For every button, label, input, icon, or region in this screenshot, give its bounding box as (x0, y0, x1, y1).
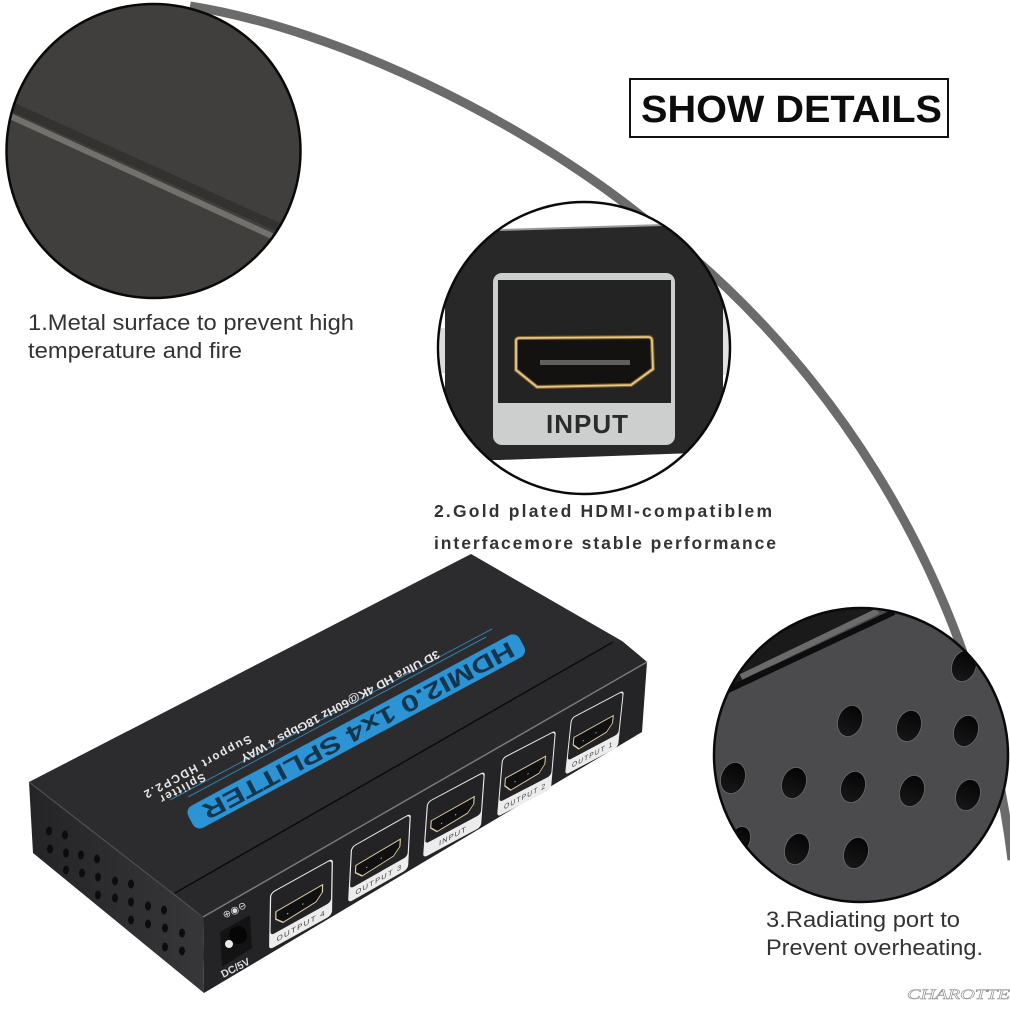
caption 2: 2.Gold plated HDMI-compatiblem (434, 501, 772, 521)
connecting arc (190, 6, 1010, 860)
blue product label (185, 632, 528, 831)
left vented face (29, 782, 204, 993)
input port frame (493, 273, 675, 445)
port: output 4: OUTPUT 4 (277, 909, 325, 944)
caption 2 (434, 501, 776, 553)
dark device body (445, 225, 723, 460)
port: output 2: OUTPUT 2 (504, 781, 545, 811)
HDMI splitter product (29, 554, 647, 993)
front lip (175, 641, 647, 917)
detail circle 3: radiating port (700, 600, 1008, 902)
caption 3: Prevent overheating. (766, 935, 983, 960)
caption 1 (28, 310, 354, 363)
port: output 1: OUTPUT 1 (572, 740, 613, 770)
DC power jack: DC/5V (219, 956, 252, 981)
port: input (423, 771, 485, 858)
ventilation holes (716, 647, 985, 872)
top printed specs: Splitter (157, 770, 207, 805)
port: output 4 (269, 858, 333, 950)
DC power jack (219, 900, 252, 981)
watermark: CHAROTTE (907, 987, 1010, 1003)
top printed specs: 3D Ultra HD 4K@60Hz 18Gbps 4 WAY (238, 647, 441, 764)
detail circle 1: metal surface (6, 4, 300, 298)
top printed specs (142, 647, 441, 805)
heading box: show details (630, 79, 948, 137)
DC power jack: ⊕◉⊖ (221, 900, 249, 921)
gold HDMI socket (516, 337, 653, 387)
port: output 3: OUTPUT 3 (355, 863, 402, 897)
heading box: show details: SHOW DETAILS (641, 89, 942, 131)
port: output 3 (348, 813, 411, 903)
blue product label: HDMI2.0 1x4 SPLITTER (198, 637, 519, 825)
input label: INPUT (546, 409, 628, 439)
caption 1: temperature and fire (28, 338, 242, 363)
top printed specs: Support HDCP2.2 (142, 732, 253, 800)
top face (29, 554, 647, 917)
caption 2: interfacemore stable performance (434, 533, 776, 553)
detail circle 2: gold plated HDMI input (438, 202, 730, 494)
port: output 1 (565, 690, 624, 775)
port: output 2 (497, 730, 556, 817)
decorative blue lines (170, 629, 492, 800)
caption 1: 1.Metal surface to prevent high (28, 310, 354, 335)
caption 3: 3.Radiating port to (766, 907, 960, 932)
port: input: INPUT (439, 825, 466, 848)
caption 3 (766, 907, 983, 960)
front panel (203, 662, 647, 993)
